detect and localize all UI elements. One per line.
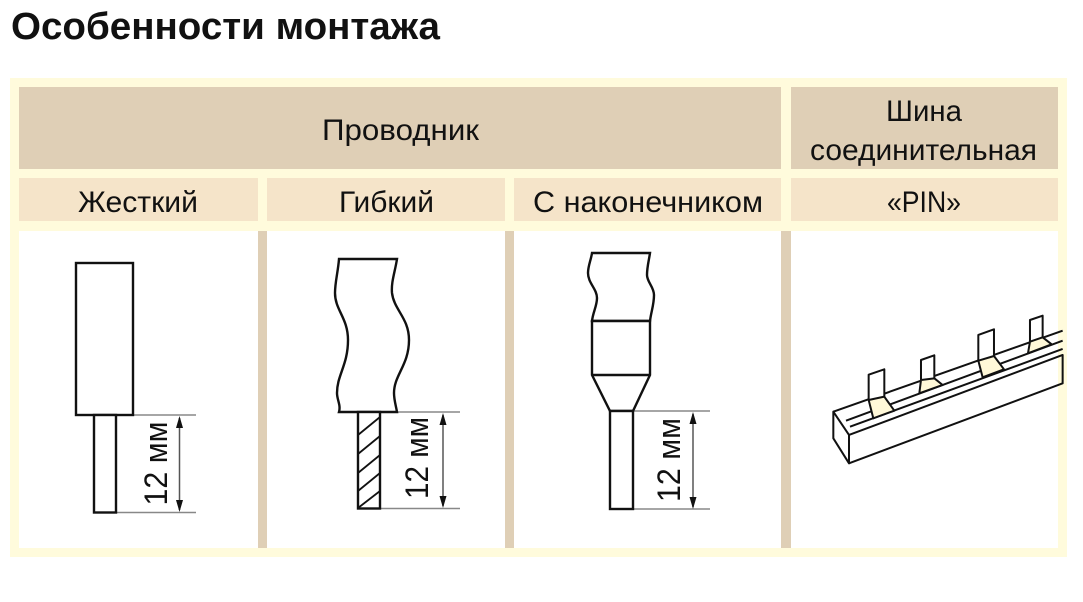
panel: table bbox=[10, 78, 1067, 557]
header: connecting bus bbox=[791, 87, 1058, 169]
dimension arrow bbox=[690, 412, 696, 509]
subheader: rigid bbox=[19, 178, 258, 221]
diagram: wire with ferrule bbox=[588, 253, 710, 509]
pin 2 bbox=[919, 355, 943, 393]
hatching bbox=[358, 417, 380, 508]
subheader: PIN: «PIN» bbox=[887, 186, 961, 219]
header: conductor bbox=[19, 87, 781, 169]
body cells bbox=[19, 231, 1058, 548]
subheader: PIN bbox=[791, 178, 1058, 221]
subheader: flexible: Гибкий bbox=[339, 186, 434, 219]
pin 4 bbox=[1028, 316, 1052, 353]
subheader: flexible bbox=[267, 178, 505, 221]
dimension arrow bbox=[176, 416, 183, 512]
diagram: rigid wire bbox=[76, 263, 196, 512]
title: Особенности монтажа bbox=[11, 6, 441, 48]
diagram: PIN busbar bbox=[833, 316, 1063, 463]
dimension arrow bbox=[440, 413, 446, 508]
dimension label: 12 мм bbox=[138, 422, 174, 506]
header: conductor: Проводник bbox=[322, 114, 480, 147]
dimension label: 12 мм bbox=[651, 418, 687, 502]
header: connecting bus: соединительная bbox=[810, 134, 1037, 167]
pin 3 bbox=[978, 329, 1004, 377]
dimension label: 12 мм bbox=[399, 417, 435, 499]
pin 1 bbox=[869, 369, 894, 418]
header: connecting bus: Шина bbox=[886, 95, 962, 128]
subheader: with ferrule bbox=[514, 178, 781, 221]
subheader: rigid: Жесткий bbox=[78, 186, 198, 219]
subheader: with ferrule: С наконечником bbox=[533, 186, 763, 219]
diagram: flexible wire bbox=[335, 259, 460, 508]
